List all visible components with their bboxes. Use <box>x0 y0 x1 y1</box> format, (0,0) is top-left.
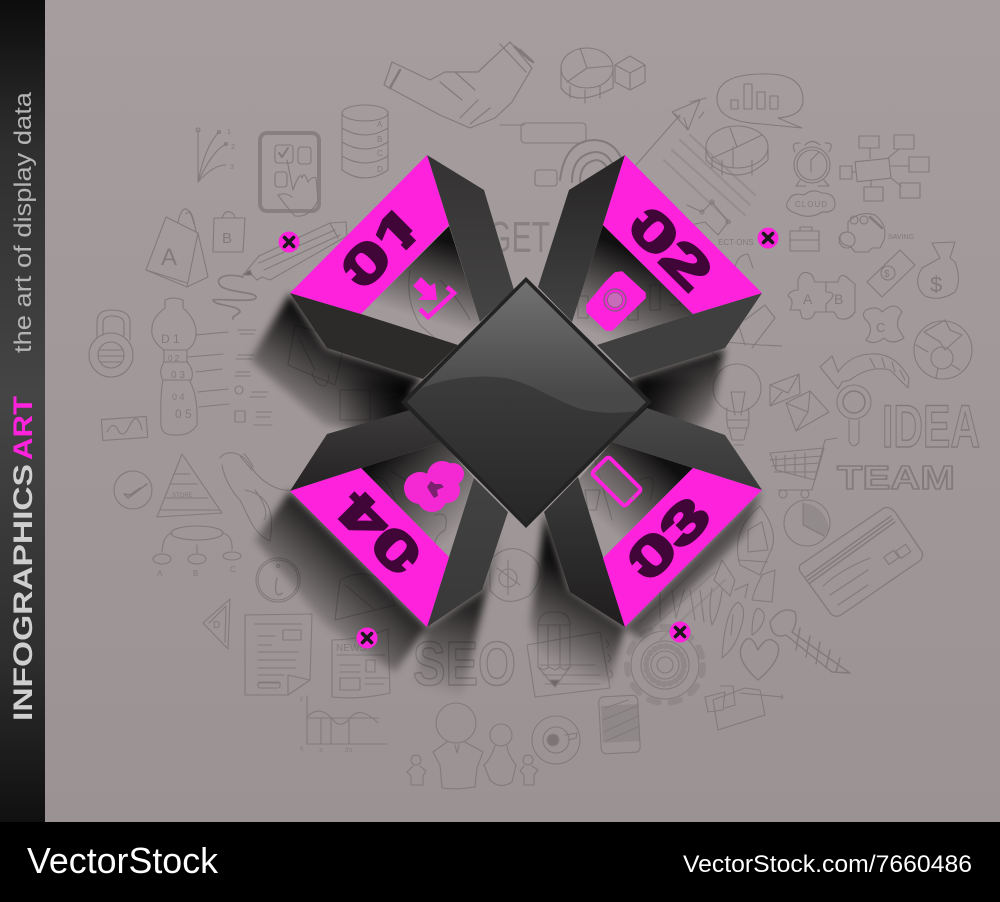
doodle: mind map <box>840 135 929 201</box>
doodle: drops heart and tie <box>722 602 850 680</box>
doodle: bottle diagram <box>152 298 272 435</box>
doodle: pyramid <box>157 454 222 517</box>
number 01 <box>326 192 438 304</box>
bullet 03 <box>670 622 690 642</box>
doodle: money bag: $ <box>930 272 942 297</box>
doodle: 3D pie and box <box>561 48 645 103</box>
diamond lower dark wave <box>407 376 637 522</box>
doodle: bag B: B <box>222 230 232 247</box>
doodle: triangle tag <box>203 599 230 649</box>
marker bullets <box>278 228 778 648</box>
doodle: TEAM lettering: TEAM <box>837 459 955 496</box>
bullet 04 <box>356 628 378 648</box>
tagline: the art of display data <box>10 91 37 353</box>
left sidebar <box>0 0 45 822</box>
number 03: 03 <box>615 486 722 593</box>
doodle: large 3D pie chart <box>706 126 768 175</box>
ribbon folds 04 <box>290 410 508 627</box>
doodle: piggy bank <box>839 214 914 252</box>
doodle: padlock <box>89 310 133 377</box>
bullet 01 <box>278 232 300 252</box>
doodle: briefcase <box>790 227 819 251</box>
footer image id: VectorStock.com/7660486 <box>683 851 972 878</box>
doodle: function graph <box>300 696 387 754</box>
ribbon folds 01 <box>290 155 514 379</box>
doodle: bottle diagram: 0 3 <box>171 370 185 381</box>
doodle: cloud: CLOUD <box>795 200 828 209</box>
doodle: creative lettering <box>640 565 725 640</box>
doodle: envelopes <box>770 374 829 431</box>
doodle: arrow <box>636 98 706 165</box>
doodle: SEO lettering: SEO <box>413 630 516 699</box>
diamond upper glossy face <box>407 282 646 522</box>
doodle: bottle diagram: D 1 <box>161 332 180 346</box>
pink label 01 <box>290 155 449 314</box>
pink label 04 <box>290 468 449 627</box>
inner triangle shading 04 <box>361 442 474 557</box>
doodle: bottle diagram: 0 2 <box>168 354 180 363</box>
doodle: pencil and squiggle <box>213 222 347 319</box>
panel 01 <box>290 155 514 379</box>
doodle: function graph: y <box>300 696 303 702</box>
doodle: check circle <box>114 471 152 509</box>
doodle: money bag <box>918 242 958 298</box>
icon: download check <box>413 277 454 317</box>
doodle: function graph: 0 <box>300 747 304 753</box>
doodle: line chart and hatching: ECT-ONS <box>718 238 754 247</box>
doodle: mouse and hand <box>220 453 292 541</box>
doodle: database stack: C <box>377 149 383 158</box>
doodle: bag B <box>213 212 245 252</box>
brand word infographics: INFOGRAPHICS <box>8 464 38 721</box>
icon: cloud user <box>404 461 464 512</box>
doodle: pyramid: STORE <box>172 493 193 499</box>
doodle: org chart <box>153 526 241 578</box>
ribbon folds 02 <box>538 155 762 378</box>
doodle: tablet with hand <box>260 133 319 216</box>
bullet 02 <box>758 228 778 248</box>
doodle: sketches behind panel 04 <box>335 470 540 620</box>
doodle: document <box>245 614 312 695</box>
doodle: line chart and hatching <box>664 135 755 268</box>
centre diamond <box>401 277 652 528</box>
doodle: alarm clock <box>793 142 831 186</box>
doodle: org chart: A <box>157 569 163 578</box>
doodle: magnifier <box>837 385 871 446</box>
doodle: pie circle <box>784 500 830 546</box>
doodle: puzzle piece C: C <box>876 320 885 335</box>
doodle: org chart: C <box>230 565 236 574</box>
black strip <box>0 822 1000 902</box>
inner triangle shading 02 <box>572 225 693 345</box>
doodle: pen and pad <box>705 686 783 730</box>
icon: camera <box>587 272 645 330</box>
doodle: database stack: D <box>377 165 383 174</box>
doodle: newspaper: NEWS <box>336 643 366 654</box>
doodle: budget lettering and swirl: GET <box>488 213 550 262</box>
doodle: puzzle pieces: A <box>803 291 813 307</box>
pink label 03 <box>603 468 762 627</box>
doodle: shopping bag A: A <box>161 244 177 271</box>
doodle: light bulb <box>713 364 761 445</box>
doodle: sketches behind panel 03 <box>570 460 653 560</box>
ribbon folds 03 <box>544 408 762 627</box>
panel 04 <box>290 410 508 627</box>
doodle: database stack: B <box>377 135 382 144</box>
doodle: rockets <box>714 506 775 602</box>
doodle: people <box>407 703 538 789</box>
doodle: banknote <box>867 250 915 297</box>
doodle: puzzle piece C <box>863 306 904 343</box>
diamond frame <box>401 277 652 528</box>
doodle: curve chart: 2 <box>231 144 235 151</box>
doodle: curved arrow <box>820 354 909 389</box>
doodle: sketches behind panel 01 <box>288 270 470 420</box>
panel 03 <box>544 408 762 627</box>
doodle: newspaper <box>332 629 390 698</box>
pink label 02 <box>603 155 762 314</box>
doodle: function graph: 2π <box>345 748 352 754</box>
doodle: org chart: B <box>193 569 198 578</box>
soft shadows cast by the folded ribbons <box>250 293 762 705</box>
doodle: chat bubble with bars <box>717 74 803 128</box>
doodle: notebook and pencil <box>527 612 612 697</box>
doodle: triangle tag: D <box>213 620 220 631</box>
doodle: puzzle pieces <box>788 272 855 319</box>
icon: smartphone <box>591 456 642 507</box>
sidebar strip <box>0 0 45 822</box>
doodle: database stack: A <box>377 120 383 129</box>
doodle: curve chart: 3 <box>230 164 234 171</box>
doodle: gear <box>627 627 703 703</box>
doodle: recycle arrow <box>914 320 972 379</box>
doodle: bottle diagram: 0 5 <box>175 407 192 421</box>
doodle: puzzle pieces: B <box>834 291 843 307</box>
doodle: credit card <box>799 508 922 616</box>
doodle: sketches behind panel 02 <box>578 283 782 360</box>
doodle: cloud <box>787 191 835 216</box>
doodle: budget lettering and swirl <box>462 123 625 262</box>
doodle: database stack <box>342 105 388 178</box>
doodle: shopping bag A <box>146 209 208 287</box>
doodle: piggy bank: SAVING <box>888 234 914 241</box>
doodle: smartphone <box>599 695 640 754</box>
number 03 <box>612 486 722 596</box>
brand word art: ART <box>8 395 38 460</box>
doodle: curve chart <box>196 128 235 182</box>
doodle: banknote: $ <box>884 269 890 280</box>
background doodles <box>89 42 980 789</box>
number 02 <box>613 192 723 302</box>
panel 02 <box>538 155 762 378</box>
doodle: curve chart: 1 <box>227 129 231 136</box>
number 01: 01 <box>329 194 436 301</box>
doodle: info circle <box>256 558 300 602</box>
doodle: bottle diagram: 0 4 <box>172 392 185 402</box>
doodle: small line graph <box>101 416 148 441</box>
inner triangle shading 01 <box>361 226 480 345</box>
footer bar <box>0 822 1000 902</box>
doodle: function graph: π <box>319 748 323 754</box>
number 02: 02 <box>616 195 723 302</box>
number 04: 04 <box>326 479 434 587</box>
footer logo: VectorStock <box>27 840 219 881</box>
doodle: coffee cup <box>532 716 580 764</box>
doodle: shopping cart <box>770 438 837 498</box>
number 04 <box>326 479 437 590</box>
inner triangle shading 03 <box>578 442 693 558</box>
doodle: handshake <box>384 42 533 128</box>
